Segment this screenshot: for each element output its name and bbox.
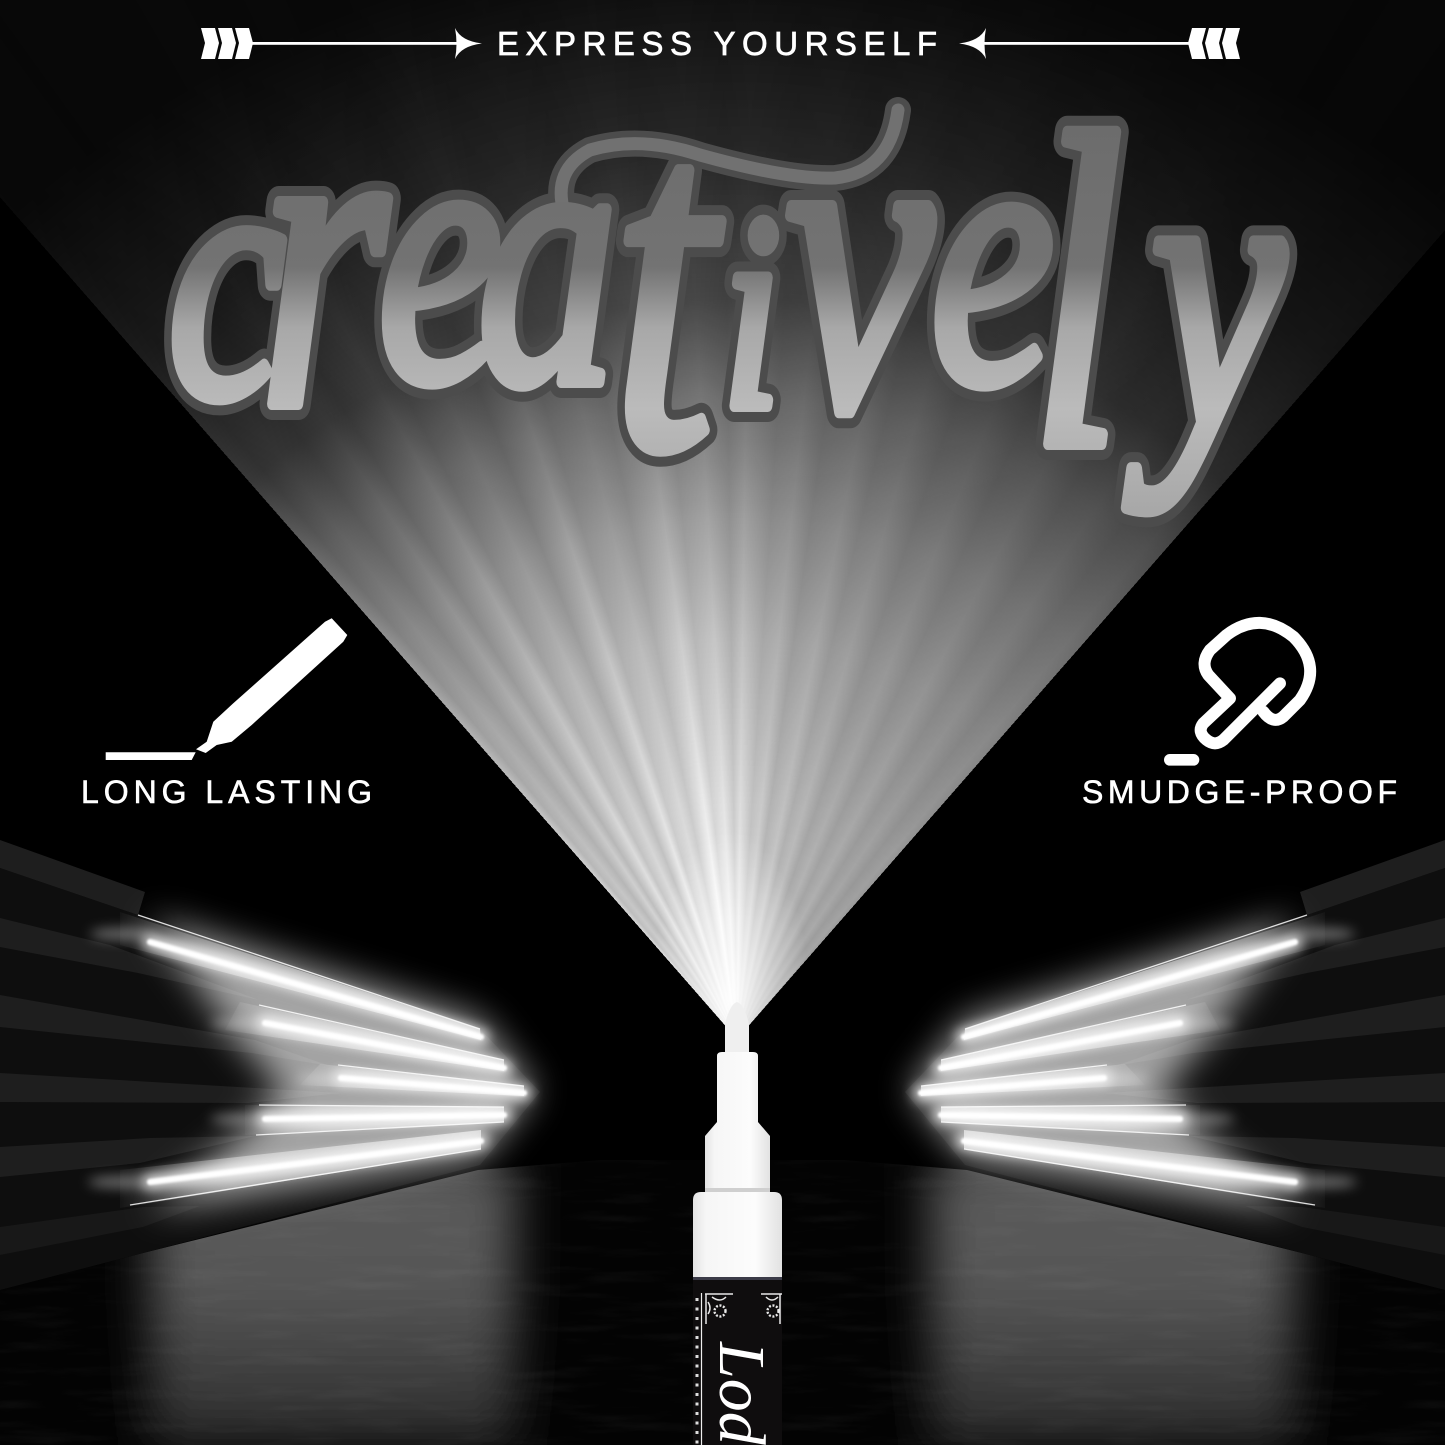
feature: smudge-proof bbox=[1082, 623, 1397, 810]
left wall glow bbox=[150, 918, 534, 1210]
feature: long lasting bbox=[81, 618, 372, 810]
word outline: e bbox=[378, 51, 502, 460]
right neon wall and floor bbox=[723, 840, 1445, 1445]
t crossbar swash bbox=[561, 110, 898, 212]
word outline: a bbox=[478, 53, 618, 462]
label brand script: Lod bbox=[705, 1341, 778, 1445]
word fill: e bbox=[378, 51, 502, 460]
label: long lasting: LONG LASTING bbox=[81, 774, 372, 810]
light beam from marker tip bbox=[0, 0, 1442, 1025]
word fill: e bbox=[930, 53, 1055, 462]
word fill: y bbox=[1122, 69, 1288, 512]
word outline: t bbox=[612, 10, 728, 552]
label: smudge-proof: SMUDGE-PROOF bbox=[1082, 774, 1397, 810]
left light panels bbox=[120, 912, 524, 1208]
left wall slats bbox=[0, 840, 340, 1255]
word outline: c bbox=[168, 85, 286, 473]
left neon tubes bbox=[150, 942, 524, 1182]
left arrow bbox=[201, 28, 482, 59]
word outline: i bbox=[722, 157, 781, 467]
label ornaments bbox=[705, 1294, 782, 1324]
marker label bbox=[693, 1277, 782, 1445]
word outline: e bbox=[930, 53, 1055, 462]
marker pen bbox=[693, 1002, 782, 1445]
word outline: r bbox=[258, 13, 393, 500]
word outline: v bbox=[785, 17, 936, 504]
word fill: a bbox=[478, 53, 618, 462]
word fill: i bbox=[722, 157, 781, 467]
icon: fingertip smudge bbox=[1164, 623, 1310, 766]
label border bbox=[696, 1298, 698, 1445]
left light stubs bbox=[88, 928, 348, 1188]
marker collar bbox=[693, 1192, 782, 1277]
left floor reflection bbox=[0, 1160, 722, 1445]
word outline: y bbox=[1122, 69, 1288, 512]
top banner bbox=[201, 25, 1240, 62]
word fill: r bbox=[258, 13, 393, 500]
word fill: v bbox=[785, 17, 936, 504]
left wall base bbox=[0, 868, 540, 1290]
left neon wall and floor bbox=[0, 840, 722, 1445]
icon: marker writing a line bbox=[106, 618, 347, 760]
left thin edge lines bbox=[130, 915, 524, 1205]
t crossbar swash outline bbox=[561, 110, 898, 212]
word fill: l bbox=[1030, 44, 1124, 542]
right arrow bbox=[959, 28, 1240, 59]
left neon tube halos bbox=[150, 942, 524, 1182]
word outline: l bbox=[1030, 44, 1124, 542]
marker nozzle bbox=[705, 1052, 770, 1192]
headline word bbox=[168, 10, 1288, 552]
word fill: t bbox=[612, 10, 728, 552]
word fill: c bbox=[168, 85, 286, 473]
banner text: EXPRESS YOURSELF bbox=[497, 25, 937, 62]
beam core glow bbox=[666, 864, 800, 1026]
marker tip bbox=[725, 1002, 749, 1052]
